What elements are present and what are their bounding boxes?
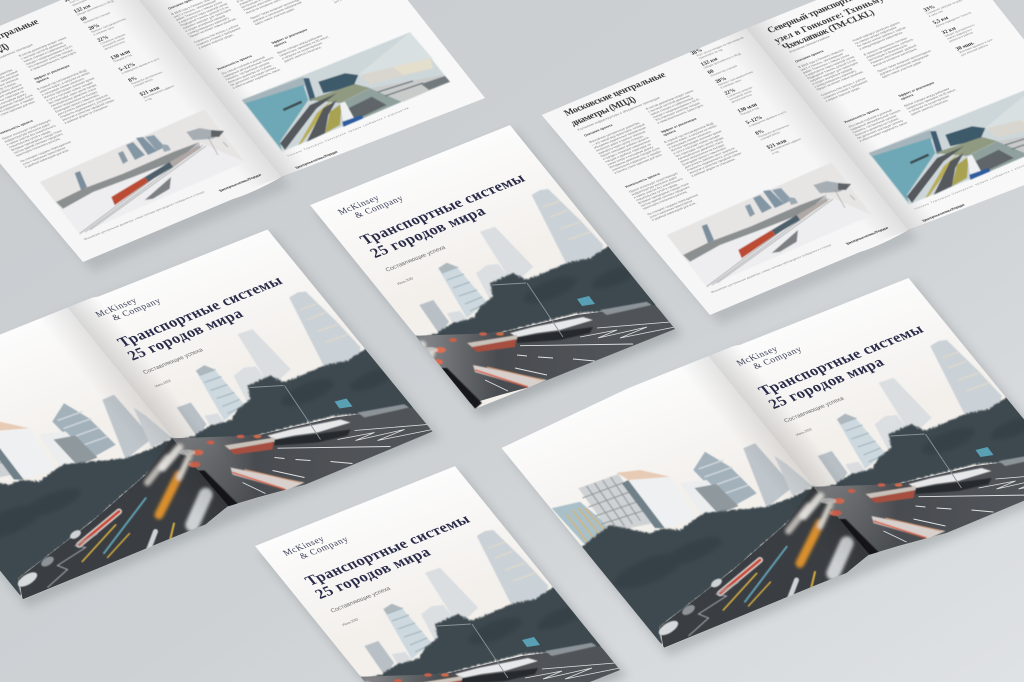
title: Транспортные системы	[114, 273, 286, 351]
statistics column: right page: 30 мин.	[955, 40, 976, 52]
text columns: left page: частью единой системы городского	[639, 185, 691, 208]
text columns: left page: Жители пригородов экономят время	[43, 76, 96, 99]
statistics column: right page: 32 км	[941, 26, 958, 36]
text columns: right page: к международному аэропорту.	[186, 16, 230, 36]
text columns: right page: мост и тоннель, связывающие	[800, 52, 844, 72]
statistics column: left page: Количество станций	[709, 64, 738, 78]
text columns: left page: в пути и получают новые поездки	[45, 81, 94, 102]
text columns: left page: без пересадок через центр города.	[47, 83, 98, 105]
caption and footer: left page	[83, 173, 262, 241]
text columns: left page: Благодаря проекту повысилась	[681, 146, 727, 167]
text columns: left page: стоимость недвижимости, улучшена	[59, 96, 112, 119]
text columns: left page: Проект использует существующую	[1, 118, 52, 141]
subtitle: Составляющие успеха	[783, 396, 846, 424]
text columns: right page: на северо-западе территории.	[854, 25, 898, 45]
caption and footer: left page: Московские центральные диаметры: новая система пригородного сообщения в столице	[710, 243, 833, 294]
text columns: left page: узлы с наземным транспортом	[649, 199, 693, 219]
text columns: right page: к международному аэропорту.	[813, 69, 857, 89]
photo: train in snow	[667, 162, 872, 287]
text columns: left page: Эффект от реализации	[660, 117, 697, 134]
statistics column: left page: Снижение загрузки	[726, 85, 754, 99]
text columns: left page: и новые участки без значительного	[6, 124, 57, 146]
statistics column: right page: в часы пик	[928, 9, 944, 18]
cover photo	[40, 466, 625, 682]
statistics column: left page: 8%	[754, 129, 766, 137]
statistics column: left page: Общая протяжённость МЦД	[703, 52, 742, 70]
text columns: left page: заметно вырос, а нагрузка на метро	[38, 71, 91, 94]
text columns: left page: в районах рядом со станциями.	[63, 104, 109, 125]
text columns: right page: дорожки и озеленение набережной	[879, 54, 930, 76]
wraparound photo	[0, 228, 438, 618]
statistics column: right page: 33%	[922, 4, 937, 13]
statistics column: left page: в год	[144, 96, 153, 102]
statistics column: left page: 130 млн	[109, 49, 133, 61]
text columns: left page: с высокой частотой движения,	[647, 94, 692, 114]
statistics column: left page: Поездок в год	[112, 53, 133, 63]
text columns: right page: проекта	[900, 93, 915, 101]
text columns: left page: Автомобильное движение стало	[677, 140, 724, 161]
text columns: right page: район Тхюньмунь с новым узлом	[802, 53, 850, 75]
text columns: right page: дороги заметно снизилась.	[283, 45, 323, 63]
statistics column: left page: в пиковые часы	[92, 25, 115, 37]
text columns: left page: в пути и получают новые поездки	[672, 134, 721, 155]
text columns: left page: и кольцевую линию снизилась.	[668, 129, 713, 150]
text columns: right page: вентиляции и безопасности.	[867, 43, 909, 62]
text columns: left page: и удобной навигацией для всех.	[24, 148, 71, 169]
text columns: right page: Проект также включает велосипедные	[876, 49, 932, 73]
text columns: right page: и обеспечивает надёжность связи.	[858, 121, 909, 143]
title: Транспортные системы	[302, 512, 473, 589]
text columns: left page: экология и качество городской среды	[688, 151, 743, 175]
statistics column: left page: в пиковые часы	[719, 78, 742, 90]
caption and footer: left page	[710, 226, 889, 294]
text columns: left page: В первый год пассажиропоток МЦД	[663, 121, 715, 144]
date: Июнь 2023	[341, 618, 359, 627]
text columns: left page: и билеты стали едиными для всех.	[613, 153, 664, 175]
statistics column: left page: 8%	[127, 76, 139, 84]
text columns: right page: дорожки и озеленение набережной	[252, 1, 303, 23]
text columns: right page: и международным аэропортом.	[858, 30, 904, 51]
text columns: right page: и аэропортом через морской залив.	[177, 2, 229, 24]
text columns: left page: инфраструктуру железных дорог	[630, 175, 679, 197]
logo: & Company	[751, 344, 804, 371]
spread: top left inner pages	[0, 0, 485, 272]
text columns: left page: В состав диаметров входят линии	[18, 36, 67, 58]
statistics column: left page: кольцевой линии	[101, 36, 126, 48]
text columns: right page: и обеспечивает надёжность связи.	[231, 68, 282, 90]
text columns: left page: строительства путей в городе.	[8, 129, 52, 149]
brochure: bottom centre cover	[255, 466, 627, 682]
text columns: left page: проекта	[35, 76, 50, 84]
text columns: left page: Это повышает качество поездок	[654, 101, 701, 122]
text columns: left page: Благодаря проекту повысилась	[54, 93, 100, 114]
text columns: left page: экология и качество городской среды	[61, 98, 116, 122]
logo: & Company	[110, 296, 163, 322]
statistics column: left page: 38%	[690, 48, 704, 57]
heading: Московские центральные диаметры: Московские центральные	[562, 71, 668, 118]
brochure: left open cover	[0, 228, 440, 618]
text columns: left page	[583, 89, 745, 222]
text columns: right page: Проект включает новые развязки.	[816, 70, 865, 92]
statistics column: left page: метрополитена	[103, 40, 126, 51]
text columns: left page: объединил радиальные направления	[593, 126, 647, 150]
text columns: right page: район Тхюньмунь с новым узлом	[175, 0, 223, 22]
spine shading	[690, 347, 882, 565]
text columns: left page: проекта	[662, 129, 677, 137]
text columns: right page: Гонконга, построенный щитами	[225, 61, 271, 81]
text columns: right page: большого диаметра на глубине.	[227, 63, 273, 84]
text columns: left page: с высокой частотой движения,	[20, 41, 65, 61]
text columns: left page: без пересадок через центр города.	[674, 136, 725, 158]
text columns: right page: сложных условий и требований	[822, 79, 869, 100]
statistics column: left page: транспорте за год	[698, 48, 723, 60]
text columns: right page: Эффект от реализации	[270, 28, 308, 45]
title: Транспортные системы	[755, 322, 927, 399]
statistics column: left page: Снижение загрузки	[99, 32, 127, 46]
date: Июнь 2023	[396, 277, 414, 286]
statistics column: left page: 132 км	[700, 57, 719, 68]
caption and footer: right page: Транспортные системы 25 городов	[294, 150, 338, 170]
text columns: left page: Проект использует существующую	[628, 171, 679, 194]
text columns: left page: узлы с наземным транспортом	[22, 146, 66, 166]
text columns: right page: и создал резервный коридор	[811, 67, 854, 86]
text columns: left page: и привлекательность транспорта	[656, 103, 704, 125]
statistics column: left page	[690, 32, 805, 155]
text columns: left page: Описание проекта	[583, 123, 614, 137]
text columns: right page: подводный автомобильный тоннель	[222, 55, 275, 79]
text columns: left page: частью единой системы городского	[12, 132, 64, 155]
statistics column: left page: Количество станций	[82, 11, 111, 25]
statistics column: left page: 5–12%	[745, 115, 765, 126]
text columns: left page: заметно вырос, а нагрузка на метро	[665, 124, 718, 147]
text columns: left page: На станциях созданы пересадочные	[646, 193, 699, 216]
text columns: left page: Эффект от реализации	[33, 64, 70, 81]
left page	[542, 28, 908, 315]
text columns: left page: доступность рабочих мест, выросла	[57, 93, 109, 116]
title: 25 городов мира	[765, 354, 888, 412]
text columns: left page: транспорта столичного региона.	[642, 190, 689, 211]
text columns: right page: подводный автомобильный тоннель	[849, 108, 902, 132]
heading: Московские центральные диаметры: Улучшение инфраструктуры и объединение пригородов	[576, 96, 661, 132]
statistics column: left page: 5–12%	[118, 62, 138, 73]
text columns: left page: Впервые пригородные поезда стали	[637, 182, 690, 205]
heading: Московские центральные диаметры	[0, 18, 41, 79]
text columns: left page: Впервые пригородные поезда стали	[10, 129, 63, 152]
brochure: centre cover	[310, 125, 682, 418]
statistics column: left page: Рост числа поездок на пригородном	[695, 36, 745, 57]
title: 25 городов мира	[367, 203, 489, 261]
text columns: right page	[167, 0, 335, 90]
statistics column: left page: Сокращение времени в пути	[121, 57, 160, 75]
text columns: left page: и привлекательность транспорта	[29, 50, 77, 72]
statistics column: left page: 60	[706, 69, 716, 76]
text columns: left page: — это новый вид транспорта, который	[590, 123, 646, 147]
text columns: right page: Уникальность проекта	[216, 54, 253, 71]
statistics column: left page: метрополитена	[730, 93, 753, 104]
statistics column: left page: $21 млн	[765, 137, 789, 151]
statistics column: left page: кольцевой линии	[728, 89, 753, 101]
statistics column: right page: 5,5 км	[932, 15, 950, 26]
text columns: right page: Это самый глубокий и длинный	[847, 108, 893, 129]
statistics column: left page: 22%	[723, 88, 738, 97]
text columns: right page: Проект включает новые развязки.	[189, 17, 238, 39]
logo: & Company	[352, 193, 405, 220]
text columns: left page: стоимость недвижимости, улучшена	[686, 149, 739, 172]
statistics column: left page: 20%	[87, 23, 102, 32]
text columns: left page: и города с помощью современных	[602, 139, 652, 161]
text columns: right page: Это самый глубокий и длинный	[220, 55, 266, 76]
text columns: left page: Уникальность проекта	[624, 172, 661, 189]
subtitle: Составляющие успеха	[385, 245, 448, 273]
text columns: left page: и новые участки без значительного	[633, 177, 684, 199]
spine shading	[49, 298, 242, 516]
caption and footer: left page: Московские центральные диаметры: новая система пригородного сообщения в столице	[83, 190, 206, 241]
statistics column: left page: станций метро	[759, 130, 781, 141]
text columns: right page: Время поездки между районами	[276, 34, 323, 55]
title: 25 городов мира	[124, 306, 247, 364]
text columns: left page: новые станции и современные	[649, 96, 695, 116]
title: 25 городов мира	[312, 544, 434, 602]
statistics column: left page: 20%	[714, 76, 729, 85]
text columns: left page: В первый год пассажиропоток МЦД	[36, 68, 88, 91]
text columns: right page: Развязки обеспечивают удобный	[870, 44, 918, 65]
statistics column: left page: Экономический эффект	[142, 84, 176, 100]
text columns: left page: инфраструктуру железных дорог	[3, 122, 52, 144]
text columns: left page: железных дорог в единые сквозные	[595, 130, 647, 152]
title: Транспортные системы	[357, 171, 528, 248]
caption and footer: right page: Тоннель Тхюньмунь-Чхеклапкок: прямое сообщение с аэропортом	[286, 106, 410, 158]
statistics column: right page: для жителей района	[960, 43, 989, 57]
text columns: right page: к охране морской среды.	[825, 86, 861, 103]
text columns: right page: Строительство велось с учётом	[820, 77, 866, 97]
text columns: right page: Он связал жилые районы с портом	[856, 26, 907, 48]
statistics column: left page: 132 км	[73, 4, 92, 15]
text columns: left page: Московские центральные диаметры	[588, 121, 641, 144]
heading: Московские центральные диаметры: диаметры (МЦД)	[568, 94, 638, 128]
date: Июнь 2023	[795, 428, 813, 437]
logo: McKinsey	[93, 296, 139, 319]
statistics column: left page: $21 млн	[138, 84, 162, 98]
text columns: left page: линии метро и кольцевую дорогу.	[606, 145, 655, 167]
text columns: right page: а нагрузка на существующие	[908, 94, 950, 113]
subtitle: Составляющие успеха	[142, 347, 205, 376]
subtitle: Составляющие успеха	[330, 586, 393, 614]
statistics column: left page: 60	[79, 16, 89, 23]
statistics column: left page: Разгрузка центральных	[757, 123, 790, 139]
text columns: right page: В проекте применены системы	[863, 36, 909, 56]
text columns: right page: Подводный тоннель длиной 5,5 км	[806, 58, 857, 80]
text columns: right page: большого диаметра на глубине.	[854, 116, 900, 137]
text columns: left page: поезда с кондиционерами и Wi-Fi.	[25, 44, 74, 66]
text columns: left page: транспорта столичного региона.	[15, 137, 62, 158]
text columns: right page: вдоль новых участков дорог.	[881, 60, 923, 79]
logo: McKinsey	[734, 344, 780, 368]
text columns: right page: и аэропортом через морской залив.	[804, 55, 856, 77]
text columns: right page: проекта	[273, 40, 288, 48]
text columns: right page: сократилось примерно на 20 минут,	[278, 35, 330, 58]
text columns: left page: доступность рабочих мест, выросла	[684, 146, 736, 169]
text columns: left page: поезда с кондиционерами и Wi-Fi.	[652, 97, 701, 119]
text columns: left page: в районах рядом со станциями.	[690, 157, 736, 178]
text columns: right page: вдоль новых участков дорог.	[254, 7, 296, 26]
text columns: right page: Он дополняет мостовую систему	[856, 119, 904, 140]
text columns: right page: Время поездки между районами	[903, 87, 950, 108]
text columns: left page: Автомобильное движение стало	[50, 87, 97, 108]
heading: Северный транспортный узел: Улучшение связности района	[788, 35, 831, 54]
text columns: right page: к охране морской среды.	[198, 33, 234, 50]
statistics column: right page: Длина подводного тоннеля	[935, 11, 972, 28]
spread: top right inner pages	[542, 0, 1024, 325]
statistics column: right page: Общая протяжённость	[944, 23, 976, 38]
text columns: right page: Строительство велось с учётом	[193, 24, 239, 44]
text columns: right page	[794, 18, 962, 143]
text columns: right page: сократил маршрут для транспорта	[809, 61, 859, 83]
logo: McKinsey	[281, 534, 326, 558]
logo: McKinsey	[336, 193, 381, 217]
statistics column: left page: 130 млн	[736, 102, 760, 114]
caption and footer: left page: Транспортные системы 25 городов	[218, 173, 262, 193]
statistics column: left page: Сокращение времени в пути	[748, 110, 787, 128]
statistics column: right page: Экономия времени в пути	[958, 38, 994, 54]
text columns: left page	[0, 36, 118, 169]
text columns: right page: сложных условий и требований	[195, 26, 242, 47]
statistics column: right page	[922, 0, 996, 57]
text columns: right page: Описание проекта	[794, 49, 825, 63]
caption and footer: right page: Транспортные системы 25 городов	[921, 203, 965, 223]
text columns: right page: сократил маршрут для транспорта	[182, 8, 232, 30]
text columns: left page: и удобной навигацией для всех.	[651, 201, 698, 222]
text columns: left page: На станциях созданы пересадочные	[19, 140, 72, 163]
heading: Северный транспортный узел: Чхеклапкок (TM-CLKL)	[780, 8, 877, 52]
text columns: left page: поездов и удобных пересадок на	[604, 142, 652, 164]
text columns: left page: Интервалы движения поездов были	[609, 146, 661, 169]
text columns: right page: и создал резервный коридор	[184, 14, 227, 33]
text columns: left page: маршруты через центр столицы.	[597, 134, 645, 155]
text columns: right page: Новый маршрут разгрузил дороги	[851, 21, 901, 42]
text columns: right page: управления движением, контроль	[865, 37, 914, 59]
text columns: right page: сократилось примерно на 20 минут,	[905, 88, 957, 111]
photo: Hong Kong port	[242, 32, 450, 152]
statistics column: left page: Экономический эффект	[769, 137, 803, 153]
text columns: right page: Гонконга, построенный щитами	[852, 114, 898, 134]
text columns: right page: В 2018 году в Гонконге открылся	[797, 48, 845, 69]
text columns: left page: и кольцевую линию снизилась.	[41, 76, 86, 97]
statistics column: left page	[63, 0, 178, 102]
statistics column: left page: 22%	[96, 35, 111, 44]
text columns: left page: значительно сокращены, а тарифы	[611, 149, 662, 172]
right page	[747, 0, 1024, 230]
logo: & Company	[297, 534, 350, 561]
text columns: left page: новые станции и современные	[22, 43, 68, 63]
wraparound photo	[494, 276, 1024, 666]
date: Июнь 2023	[154, 379, 172, 388]
statistics column: left page: Прирост пассажиропотока	[717, 70, 754, 87]
statistics column: left page: Прирост пассажиропотока	[90, 17, 127, 34]
statistics column: left page: Поездок в год	[739, 106, 760, 116]
text columns: right page: а нагрузка на существующие	[281, 41, 323, 60]
statistics column: left page: станций метро	[132, 77, 154, 88]
statistics column: left page: Разгрузка центральных	[130, 70, 163, 86]
text columns: left page: Жители пригородов экономят время	[670, 129, 723, 152]
text columns: left page: Проект связывает районы области	[599, 136, 650, 158]
text columns: right page: Подводный тоннель длиной 5,5 км	[179, 5, 230, 27]
statistics column: right page: развязок в районе	[948, 30, 974, 43]
text columns: right page: выезд на основные магистрали.	[872, 47, 919, 68]
photo: Hong Kong port	[869, 85, 1024, 205]
brochure: right open cover	[494, 276, 1024, 666]
text columns: left page: строительства путей в городе.	[635, 182, 679, 202]
statistics column: right page	[295, 0, 369, 4]
text columns: left page: менее загруженным на въездах.	[52, 90, 99, 111]
right page	[120, 0, 485, 177]
left page	[0, 0, 281, 262]
caption and footer: left page: Транспортные системы 25 городов	[845, 226, 889, 246]
text columns: right page: Он дополняет мостовую систему	[229, 66, 277, 87]
cover photo	[310, 125, 675, 409]
statistics column: left page: в год	[771, 149, 780, 155]
text columns: left page: В состав диаметров входят линии	[645, 89, 694, 111]
text columns: right page: дороги заметно снизилась.	[910, 98, 950, 116]
text columns: right page: Эффект от реализации	[897, 81, 935, 98]
statistics column: right page: нового маршрута и	[946, 27, 973, 41]
text columns: left page: Это повышает качество поездок	[27, 48, 74, 69]
photo: train in snow	[40, 109, 245, 234]
text columns: left page: менее загруженным на въездах.	[679, 143, 726, 164]
text columns: right page: Уникальность проекта	[843, 107, 880, 124]
